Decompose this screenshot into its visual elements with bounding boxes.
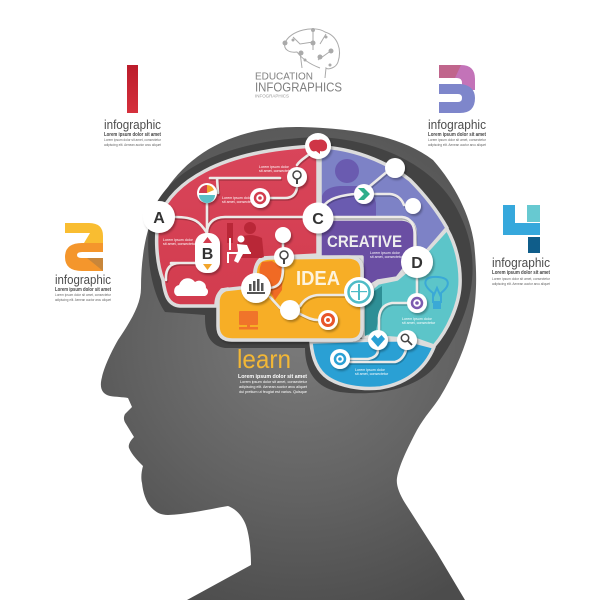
brain diagram <box>143 133 460 389</box>
caption: blue: sit amet, consectetur <box>355 372 389 376</box>
head silhouette <box>101 127 476 600</box>
panel: purple lobe <box>320 219 415 291</box>
node: white circle idea <box>280 300 300 320</box>
caption: teal <box>402 317 436 325</box>
label block 1: adipiscing elit. Aenean auctor arcu aliquet <box>104 142 162 147</box>
icon: magnifier 2 <box>274 247 294 267</box>
label block 2: adipiscing elit. Aenean auctor arcu aliquet <box>55 297 112 302</box>
brain shadow <box>148 137 473 393</box>
text block: learn: Lorem ipsum dolor sit amet, consectetur <box>240 379 308 384</box>
text block: learn <box>238 374 308 394</box>
title: education infographics: INFOGRAPHICS <box>255 80 342 94</box>
node D <box>401 246 433 278</box>
title: education infographics: EDUCATION <box>255 72 313 82</box>
title: education infographics <box>255 72 342 98</box>
heading: learn: learn <box>237 344 291 374</box>
number 1 <box>127 65 138 113</box>
icon: wheel red <box>250 188 270 208</box>
icon: heart <box>368 330 388 350</box>
icon: person bust <box>322 159 376 219</box>
node A <box>143 201 175 233</box>
panel text: red lobe captions: sit amet, consectetur <box>163 242 197 246</box>
icon: pie <box>197 183 217 203</box>
label block 1: infographic <box>104 118 161 132</box>
text block: learn: Lorem ipsum dolor sit amet <box>238 374 307 380</box>
orange accent <box>260 261 283 300</box>
icon: brain <box>305 133 331 159</box>
caption: creative: Lorem ipsum dolor <box>370 251 401 255</box>
panel: orange idea lobe <box>218 257 362 340</box>
node B: B <box>202 246 213 263</box>
node: white circle lavender right <box>405 198 421 214</box>
icon: cloud <box>174 278 208 296</box>
number 2 <box>65 223 103 271</box>
icon: green chevrons <box>354 184 374 204</box>
text block: learn: dui pretium ut feugiat est varius. Quisque <box>239 389 307 394</box>
panel: teal lobe <box>363 229 460 346</box>
caption: teal: Lorem ipsum dolor <box>402 317 433 321</box>
icon: search <box>397 330 417 350</box>
label block 1 <box>104 118 162 147</box>
icon: silhouette at desk <box>227 222 264 258</box>
caption: teal: sit amet, consectetur <box>402 321 436 325</box>
logo: brain line art <box>282 28 339 78</box>
node D: D <box>411 255 423 272</box>
node: white circle top <box>275 227 291 243</box>
icon: purple wheel <box>407 293 427 313</box>
panel text: red lobe captions <box>163 165 293 246</box>
node: white circle lavender top <box>385 158 405 178</box>
label block 2 <box>55 273 112 302</box>
label block 4: Lorem ipsum dolor sit amet, consectetur <box>492 276 551 281</box>
label block 2: infographic <box>55 273 111 287</box>
icon: magnifier <box>287 167 307 187</box>
icon: gear <box>318 310 338 330</box>
panel: blue lobe <box>311 340 434 389</box>
node C <box>302 202 334 234</box>
label block 3 <box>428 118 487 147</box>
panel text: red lobe captions: Lorem ipsum dolor <box>222 196 253 200</box>
caption: creative <box>370 251 404 259</box>
panel: red lobe <box>157 146 318 306</box>
panel: lavender lobe <box>320 147 447 262</box>
node A: A <box>153 210 165 227</box>
icon: bar chart <box>241 273 271 303</box>
icon: blue wheel <box>330 349 350 369</box>
number 3 <box>439 65 475 113</box>
label block 1: Lorem ipsum dolor sit amet, consectetur <box>104 137 162 142</box>
heading: creative: CREATIVE <box>327 232 402 251</box>
label block 2: Lorem ipsum dolor sit amet, consectetur <box>55 292 112 297</box>
label block 4: adipiscing elit. Aenean auctor arcu aliquet <box>492 281 551 286</box>
label block 2: Lorem ipsum dolor sit amet <box>55 287 111 293</box>
icon: light bulb <box>425 277 448 308</box>
label block 3: infographic <box>428 118 486 132</box>
title: education infographics: INFOGRAPHICS <box>255 94 289 98</box>
label block 3: Lorem ipsum dolor sit amet <box>428 132 486 138</box>
node C: C <box>312 211 324 228</box>
panel text: red lobe captions: Lorem ipsum dolor <box>259 165 290 169</box>
label block 1: Lorem ipsum dolor sit amet <box>104 132 161 138</box>
icon: monitor <box>239 311 258 330</box>
node B <box>195 233 220 273</box>
label block 3: adipiscing elit. Aenean auctor arcu aliquet <box>428 142 487 147</box>
caption: creative: sit amet, consectetur <box>370 255 404 259</box>
icon: person at computer <box>227 236 251 263</box>
label block 4: Lorem ipsum dolor sit amet <box>492 270 550 276</box>
caption: blue: Lorem ipsum dolor <box>355 368 386 372</box>
label block 4 <box>492 256 551 286</box>
text block: learn: adipiscing elit. Aenean auctor arcu aliquet <box>239 384 308 389</box>
panel text: red lobe captions: sit amet, consectetur <box>222 200 256 204</box>
dark teal shade <box>365 286 382 336</box>
panel text: red lobe captions: Lorem ipsum dolor <box>163 238 194 242</box>
label block 4: infographic <box>492 256 550 270</box>
icon: clock <box>344 277 374 307</box>
connector lines <box>166 152 418 364</box>
caption: blue <box>355 368 389 376</box>
heading: idea: IDEA <box>296 268 340 290</box>
panel text: red lobe captions: sit amet, consectetur <box>259 169 293 173</box>
label block 3: Lorem ipsum dolor sit amet, consectetur <box>428 137 487 142</box>
number 4 <box>503 205 540 253</box>
